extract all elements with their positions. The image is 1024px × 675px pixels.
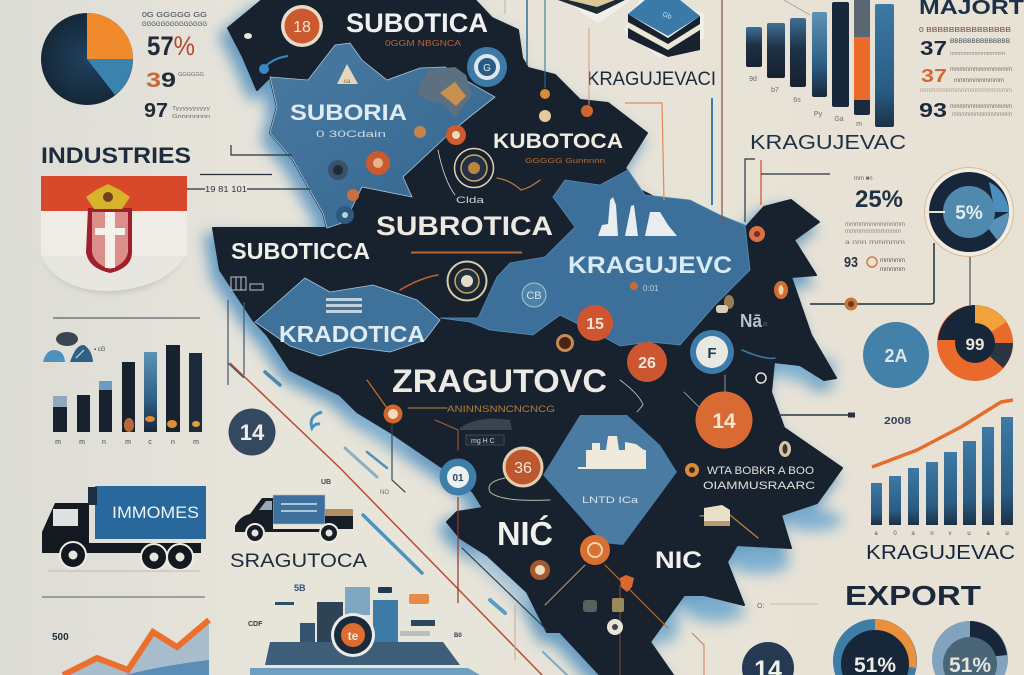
oval cream marker — [779, 441, 791, 457]
small connector text: 19 81 101 — [205, 185, 248, 194]
skyline Kragujevac — [598, 197, 677, 236]
text Na: Nā — [740, 311, 763, 331]
badge 14 dark: 14 — [240, 420, 265, 445]
small truck load — [325, 509, 353, 516]
pie stats: 0G GGGGG GG — [142, 10, 207, 19]
trend line — [872, 400, 1013, 467]
axis labels: u — [1005, 531, 1009, 537]
blue ring icon: G — [483, 63, 491, 74]
3D bar axis labels: b7 — [771, 87, 779, 94]
stats list top right: 37 — [920, 38, 947, 60]
label above small truck: UB — [321, 479, 331, 486]
heading: Export: EXPORT — [845, 580, 981, 611]
left bar chart — [53, 345, 202, 446]
small white ring — [756, 373, 766, 383]
small caption: Clda — [456, 195, 484, 205]
small factory icon left — [231, 277, 263, 290]
bar axis labels: n — [171, 439, 175, 446]
ship and port scene — [248, 583, 480, 675]
stats list top right: mmmmmmmmmmmmm — [950, 104, 1012, 110]
pie stats: Tyyyyyyyyyy — [172, 106, 210, 112]
blue dashes on beach — [265, 372, 567, 675]
3D bar axis labels: 9d — [749, 76, 757, 83]
stats list top right: mmmmmmmmmm — [954, 78, 1004, 84]
axis labels: a — [986, 531, 990, 537]
region: Kradotica — [255, 278, 440, 356]
truck cargo box — [95, 486, 206, 539]
bar axis labels: m — [193, 439, 199, 446]
pie stats — [142, 10, 210, 122]
car icon in map — [460, 419, 512, 445]
small caption by coast: NO — [380, 490, 389, 496]
small truck box — [273, 495, 325, 524]
stat 25 percent: mmmmm — [880, 258, 905, 264]
badge 18: 18 — [293, 19, 311, 36]
book stack right — [624, 0, 704, 58]
ground rule truck — [48, 570, 200, 572]
orange donut chart — [937, 305, 1013, 381]
3D bar axis labels — [749, 76, 862, 128]
stat 25 percent: mmmmm — [880, 267, 905, 273]
blue arc near beach — [311, 412, 322, 428]
pins lower — [530, 535, 634, 635]
axis labels: a — [911, 531, 915, 537]
stat 25 percent: a nnn mmmmm — [845, 239, 905, 246]
label: Kragujevac in map: KRAGUJEVC — [568, 252, 732, 279]
stats list top right: mmmmmmmmmmmm — [950, 51, 1005, 57]
flag white band — [41, 211, 187, 256]
stats list top right: 93 — [919, 100, 947, 122]
map caption right: OIAMMUSRAARC — [703, 480, 815, 492]
decorative landmark icons above bars: ▪ cG — [94, 347, 106, 353]
blue map marker — [440, 458, 476, 496]
bar axis labels: m — [55, 439, 61, 446]
region: Suboria — [270, 43, 495, 228]
flag red band — [41, 176, 187, 211]
stat 25 percent: mm ■n — [854, 176, 873, 182]
map pins upper — [328, 89, 593, 224]
map of Serbia — [213, 0, 842, 675]
stats list top right: mmmmmmmmmmmmm — [952, 112, 1012, 118]
pie stats: GGGGGGGGGGGGGG — [142, 21, 207, 28]
connector pin — [844, 298, 858, 310]
top-right 3D bar chart — [746, 0, 894, 128]
ship and port scene: CDF — [248, 621, 263, 628]
pin with stem near Kragujevac east — [716, 295, 734, 313]
area line chart — [63, 620, 209, 675]
port captions: 5B — [294, 583, 306, 593]
map silhouette — [213, 0, 842, 675]
left map frame lines — [228, 300, 244, 385]
caption near Na: a: — [763, 321, 769, 328]
pie orange slice — [87, 13, 133, 59]
sublabel Kragujevac — [630, 282, 659, 293]
ship and port scene: te — [348, 629, 359, 643]
blue circle icon — [863, 322, 929, 388]
label: Kragujevac top: KRAGUJEVACI — [587, 69, 716, 90]
badge 14 bottom — [742, 642, 794, 675]
caption near coast bottom — [757, 603, 818, 610]
small truck wheels — [246, 524, 338, 542]
pie stats: 97 — [144, 100, 168, 122]
caption near coast bottom: O: — [757, 603, 764, 610]
badge 14 dark — [228, 408, 276, 456]
heading: Industries: INDUSTRIES — [41, 143, 191, 168]
port tags — [378, 587, 392, 593]
truck label: IMMOMES — [112, 503, 199, 522]
stats list top right: 0 BBBBBBBBBBBBBBB — [919, 27, 1011, 34]
badge 14 orange: 14 — [712, 410, 736, 433]
caption Nis hexagon: LNTD ICa — [582, 495, 638, 505]
label: Suboticca left: SUBOTICCA — [231, 238, 370, 264]
label: Zragutovc: ZRAGUTOVC — [392, 363, 607, 399]
arrow line right — [777, 412, 855, 418]
label: Kubotoca: KUBOTOCA — [493, 130, 623, 153]
stat 25 percent: mmmmmmmmmmmm — [845, 221, 905, 228]
sublabel Zragutovc: ANINNSNNCNCNCG — [447, 404, 555, 414]
pin Zragutovc — [384, 404, 402, 424]
blue network icon — [522, 283, 546, 307]
stats list top right — [919, 27, 1012, 122]
truck wheels — [60, 542, 193, 570]
label: Kragujevac upper right: KRAGUJEVAC — [750, 132, 906, 154]
bar axis labels: c — [148, 439, 152, 446]
containers — [300, 623, 315, 642]
skyline Nis hexagon — [578, 436, 646, 469]
label: Nic right: NIC — [655, 547, 702, 574]
badge 36 — [502, 446, 544, 488]
rule above bar chart — [53, 317, 200, 319]
vertical line from blue marker — [457, 497, 459, 603]
slate landmark icon — [417, 67, 472, 118]
truck chassis — [88, 543, 201, 553]
year label: 2008 — [884, 416, 912, 427]
blue circle icon: 2A — [884, 346, 908, 366]
stat 25 percent: 93 — [844, 254, 858, 271]
axis labels: a — [874, 531, 878, 537]
label: Subrotica center: SUBROTICA — [376, 211, 553, 241]
orange ring marker — [685, 463, 699, 477]
car icon in map: mg H C — [471, 438, 495, 445]
donut chart export right — [932, 621, 1008, 675]
axis labels — [874, 531, 1009, 537]
label: Suboria: SUBORIA — [290, 100, 407, 125]
pie stats: 39 — [146, 69, 176, 92]
truck cab — [42, 503, 89, 553]
axis labels: n — [930, 531, 934, 537]
bar axis labels: m — [125, 439, 131, 446]
map caption right — [703, 465, 815, 492]
large truck — [42, 486, 206, 570]
orange and white connector lines inside map — [367, 150, 775, 675]
pin dark orange — [556, 334, 574, 352]
map shadow — [207, 8, 842, 675]
diagonal red line — [230, 363, 542, 675]
badge 26 — [627, 342, 667, 382]
Serbian flag shield — [41, 176, 187, 294]
stat 25 percent: mmmmmmmmmmm — [845, 229, 901, 235]
stats list top right: 37 — [921, 66, 947, 86]
blue ring icon right — [690, 330, 734, 374]
3D bar axis labels: Ga — [834, 116, 844, 123]
axis labels: u — [967, 531, 971, 537]
coat of arms — [86, 184, 132, 273]
stats list top right: BBBBBBBBBBBBBB — [950, 39, 1010, 45]
bar axis labels: m — [79, 439, 85, 446]
label: Kradotica: KRADOTICA — [279, 321, 425, 347]
pie blue slice — [87, 59, 133, 95]
pie stats: Gnnnnnnnn — [172, 114, 210, 120]
stat 25 percent: 25% — [855, 186, 903, 213]
vertical line low right of beach — [514, 605, 516, 660]
3D bar axis labels: Py — [814, 111, 823, 118]
orange donut label: 99 — [966, 335, 984, 354]
small truck — [235, 495, 353, 542]
region: Kragujevac — [440, 170, 750, 346]
sublabel Kragujevac: 0:01 — [643, 284, 659, 293]
donut chart export left — [833, 619, 917, 675]
badge 15 — [577, 305, 613, 341]
triangle landmark icon: ca — [344, 79, 351, 85]
blue ring icon right: F — [707, 345, 717, 362]
badge 15: 15 — [586, 316, 604, 333]
triangle landmark icon — [337, 64, 358, 85]
stats list top right: mmmmmmmmmmmmm — [950, 67, 1012, 73]
connector lines right middle — [745, 159, 970, 305]
donut label: 5% — [955, 203, 983, 224]
book stack left — [558, 0, 632, 24]
ring icon center — [448, 262, 486, 300]
small truck cab — [235, 498, 325, 532]
cream box icon — [704, 505, 730, 526]
pie stats: GGGGGG — [178, 72, 204, 78]
orange corner line — [692, 633, 704, 675]
stats list top right: mmmmmmmmmmmmmmmmmm — [920, 88, 1012, 94]
vertical connector lines top — [505, 0, 810, 225]
book stack right: Gb — [661, 11, 673, 21]
rule above line chart — [42, 596, 205, 598]
blue map marker: 01 — [452, 473, 464, 484]
sublabel top: 0GGM NBGNCA — [385, 39, 462, 48]
donut chart 57 percent — [924, 168, 1014, 256]
axis labels: 0 — [893, 531, 897, 537]
icon building Kradotica — [326, 298, 362, 313]
stat 25 percent — [844, 176, 905, 273]
label: Kragujevac lower right: KRAGUJEVAC — [866, 542, 1015, 564]
axis labels: v — [948, 531, 952, 537]
bar axis labels — [55, 439, 199, 446]
3D bar axis labels: 6s — [793, 97, 801, 104]
label: Nic large: NIĆ — [497, 515, 553, 552]
ship and port scene: B0 — [454, 633, 462, 639]
ship hull — [265, 642, 460, 665]
map caption right: WTA BOBKR A BOO — [707, 465, 814, 477]
region: Nis hexagon — [543, 415, 677, 545]
line chart value: 500 — [52, 632, 69, 643]
label: Subotica top: SUBOTICA — [346, 8, 488, 38]
port badge — [331, 613, 375, 657]
badge 18 — [281, 5, 323, 47]
decorative landmark icons above bars — [43, 332, 106, 362]
shield base — [42, 253, 185, 294]
top-left pie chart — [41, 13, 133, 105]
label: Sragutoca: SRAGUTOCA — [230, 551, 367, 572]
badge 14 orange — [696, 392, 752, 448]
sublabel Kubotoca: GGGGG Gunnnnn — [525, 158, 605, 165]
badge 26: 26 — [638, 355, 656, 372]
connector lines left — [187, 145, 310, 189]
pin with drop — [244, 33, 288, 74]
sublabel Suboria: 0 30Cdain — [316, 129, 386, 139]
ring icon upper — [454, 148, 494, 188]
right bar chart with trend line — [871, 400, 1013, 537]
center orange rule — [411, 252, 522, 254]
bar axis labels: n — [102, 439, 106, 446]
pin upper right in black region — [749, 226, 788, 299]
3D bar axis labels: m — [856, 121, 862, 128]
blue ring icon — [467, 47, 507, 87]
pie stats: 57% — [147, 31, 195, 61]
blue network icon: CB — [526, 290, 542, 302]
badge 36: 36 — [514, 460, 532, 477]
